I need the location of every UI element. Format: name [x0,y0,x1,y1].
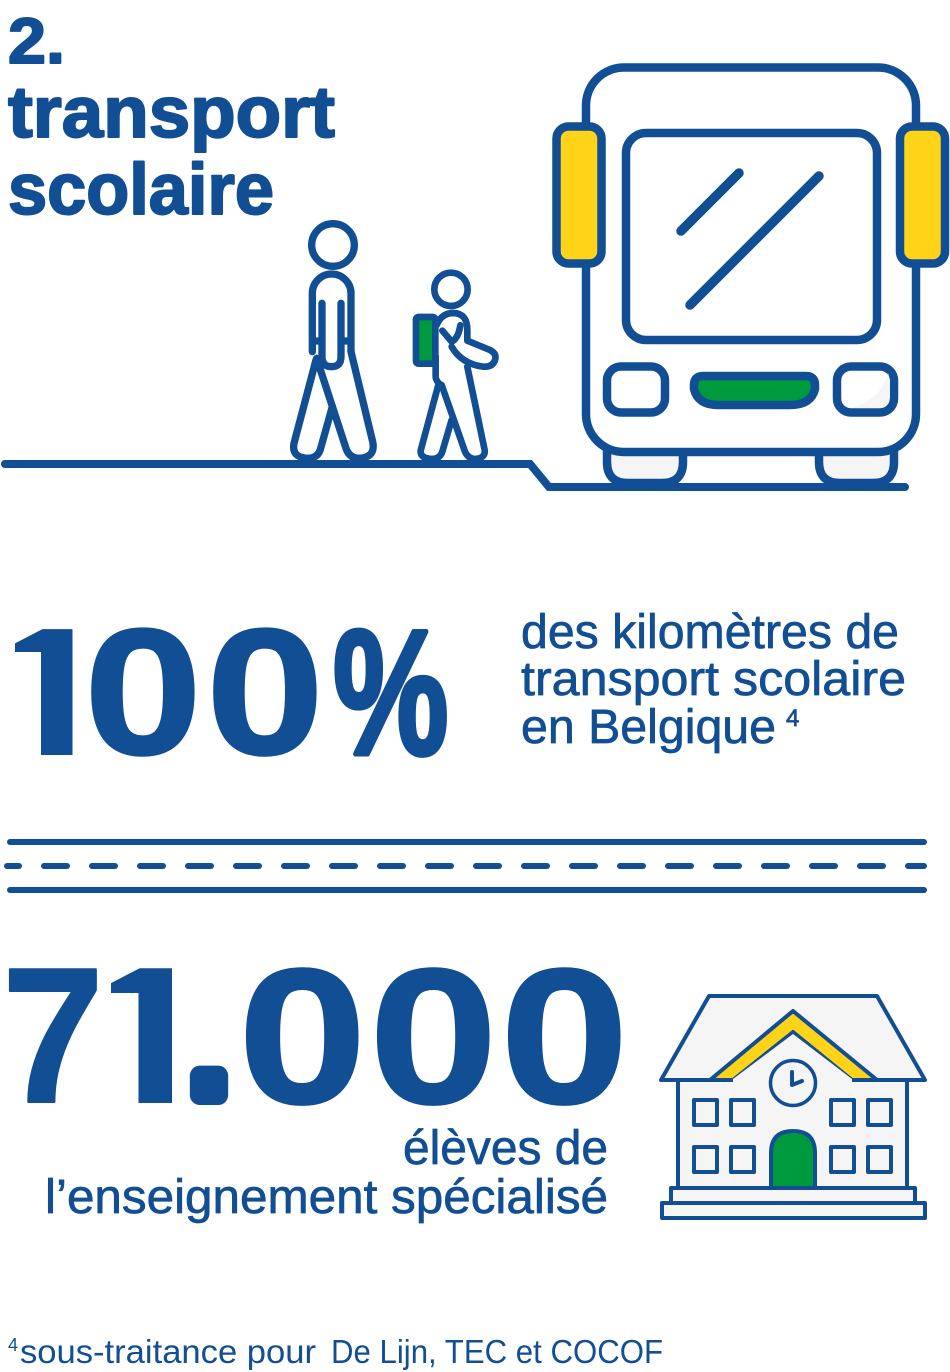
footnote: De Lijn, TEC et COCOF [331,1333,663,1370]
footnote: 4 [8,1335,18,1355]
footnote: sous-traitance pour [20,1333,316,1370]
windows [694,1100,891,1172]
text: kilometres description: transport scolaire [521,653,906,706]
big number 100%: 0 [206,591,324,792]
big number 100%: % [333,594,449,793]
big number 71.000 [8,967,620,1106]
yellow gable [710,1011,877,1080]
big number 71.000: 1 [82,928,216,1144]
big number 71.000: 7 [2,928,104,1143]
icon: school building [661,996,925,1218]
roof [661,996,925,1080]
upper step [671,1188,915,1203]
wall gable [733,1034,852,1082]
title: transport [8,73,335,153]
text: pupils description [45,1122,608,1224]
icon: bus front [556,68,945,483]
big number 71.000: . [191,977,227,1123]
text: kilometres description: en Belgique [521,701,776,754]
title [8,5,335,230]
bus wheels [607,450,894,483]
text: kilometres description: des kilomètres de [521,606,899,659]
left mirror [556,126,602,264]
text: pupils description: l’enseignement spécialisé [45,1171,608,1224]
building wall [678,1080,907,1188]
footnote [8,1333,663,1370]
text: pupils description: élèves de [403,1122,608,1175]
big number 71.000: 0 [369,929,498,1145]
green door [771,1131,815,1188]
icon: child with backpack [416,273,495,459]
big number 71.000: 0 [238,929,367,1145]
text: kilometres description: 4 [786,705,799,732]
windshield [626,133,877,340]
clock [770,1060,816,1106]
right headlight [837,366,894,412]
title: 2. [8,5,65,77]
ground line [5,464,905,487]
title: scolaire [8,150,274,230]
bus body [586,68,916,452]
big number 100% [15,627,447,758]
big number 100%: 0 [84,591,202,792]
right mirror [900,126,945,264]
left headlight [607,366,665,412]
green grille [694,376,815,405]
road divider [7,842,924,890]
text: kilometres description [521,606,906,754]
lower step [662,1203,925,1218]
icon: adult walking [294,224,373,458]
big number 71.000: 0 [500,929,629,1145]
